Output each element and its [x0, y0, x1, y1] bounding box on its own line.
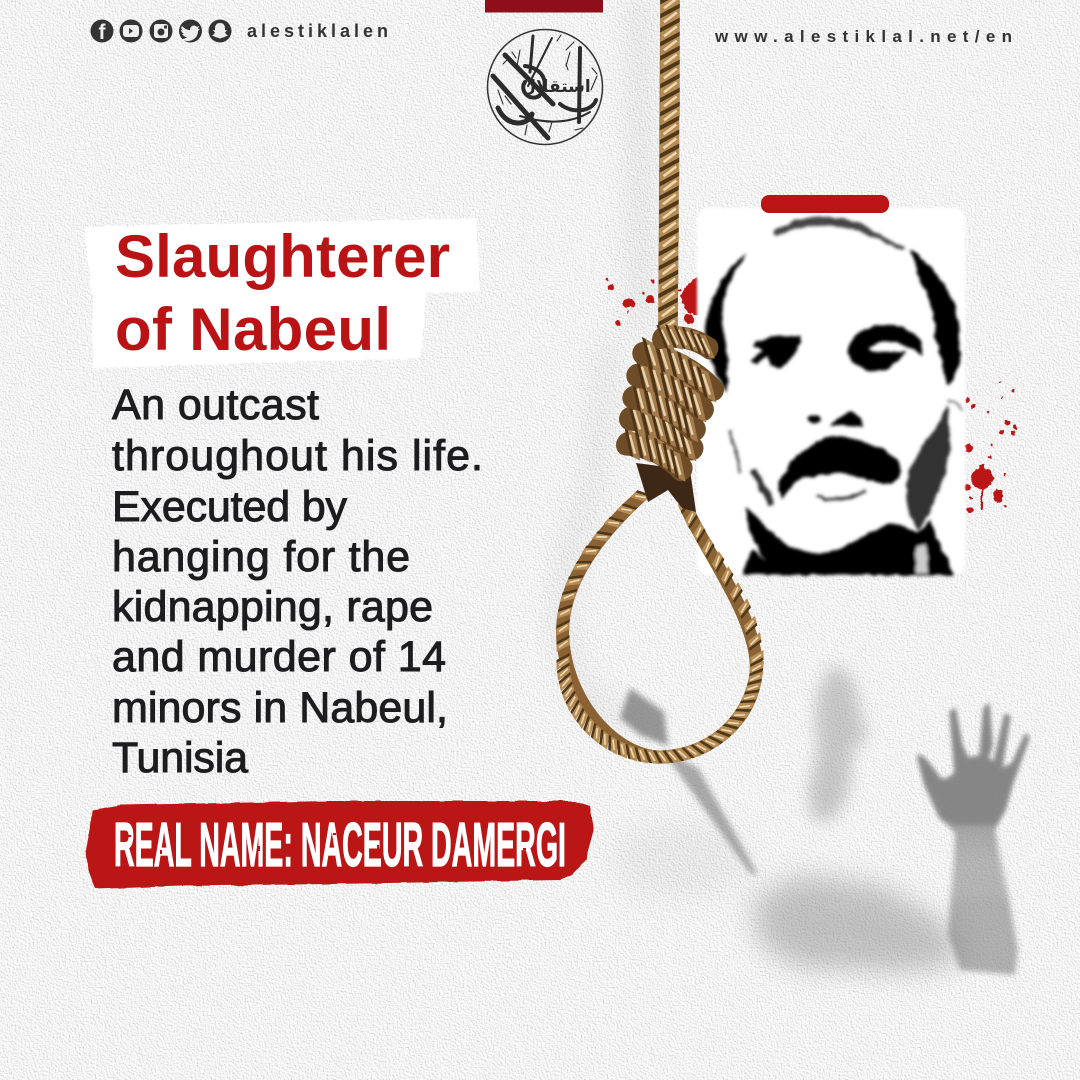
description text block: throughout his life.	[112, 432, 483, 480]
wall shadows	[563, 0, 1029, 975]
shadow: rope	[563, 0, 640, 720]
icon: snapchat	[208, 20, 232, 42]
knot coils	[615, 322, 729, 482]
shadow: hand	[917, 703, 1029, 825]
logo: calligraphic roundel	[488, 30, 602, 144]
photo face	[706, 217, 963, 575]
title text line 1: Slaughterer	[115, 223, 450, 290]
description text block: Executed by	[112, 483, 348, 531]
icon: instagram	[150, 20, 172, 42]
icon: facebook: f	[98, 21, 106, 44]
distress specks on text	[128, 833, 551, 854]
knot neck	[636, 463, 696, 512]
description text block: hanging for the	[112, 533, 410, 581]
red brush stroke	[86, 801, 594, 889]
icon: youtube	[120, 20, 142, 42]
title text line 2: of Nabeul	[115, 296, 391, 363]
description text block: kidnapping, rape	[112, 583, 433, 631]
title	[84, 218, 480, 368]
title highlight line 1	[84, 218, 480, 296]
red tape bar	[761, 195, 889, 213]
social media handle	[90, 20, 388, 44]
shadow: raised hand and wrist	[917, 703, 1029, 905]
shadow: forearm	[752, 875, 960, 972]
portrait photo	[697, 195, 965, 575]
logo: calligraphic roundel: استقلال	[521, 77, 591, 97]
icon: facebook	[90, 20, 114, 44]
vertical rope	[658, 0, 680, 337]
rope loop	[556, 485, 764, 764]
shadow: soft haze	[610, 820, 750, 900]
description text block: minors in Nabeul,	[112, 684, 448, 732]
photo card	[697, 208, 965, 575]
shadow: knife	[620, 688, 758, 875]
blood splatter: left	[606, 276, 700, 326]
shadow: attacker head	[808, 665, 868, 822]
description text block	[112, 381, 483, 782]
icon: twitter	[179, 20, 202, 42]
description text block: An outcast	[112, 381, 319, 429]
description text block: Tunisia	[112, 734, 248, 782]
top red tab	[485, 0, 603, 12]
blood splatter: right	[965, 381, 1017, 513]
shadow: lower arm	[948, 825, 1018, 975]
handle text: alestiklalen	[247, 21, 388, 41]
text: REAL NAME: NACEUR DAMERGI	[114, 811, 566, 880]
real name banner	[86, 801, 594, 889]
website url: www.alestiklal.net/en	[714, 27, 1012, 46]
hanging rope noose	[556, 0, 764, 764]
description text block: and murder of 14	[112, 633, 446, 681]
title highlight line 2	[93, 290, 426, 368]
